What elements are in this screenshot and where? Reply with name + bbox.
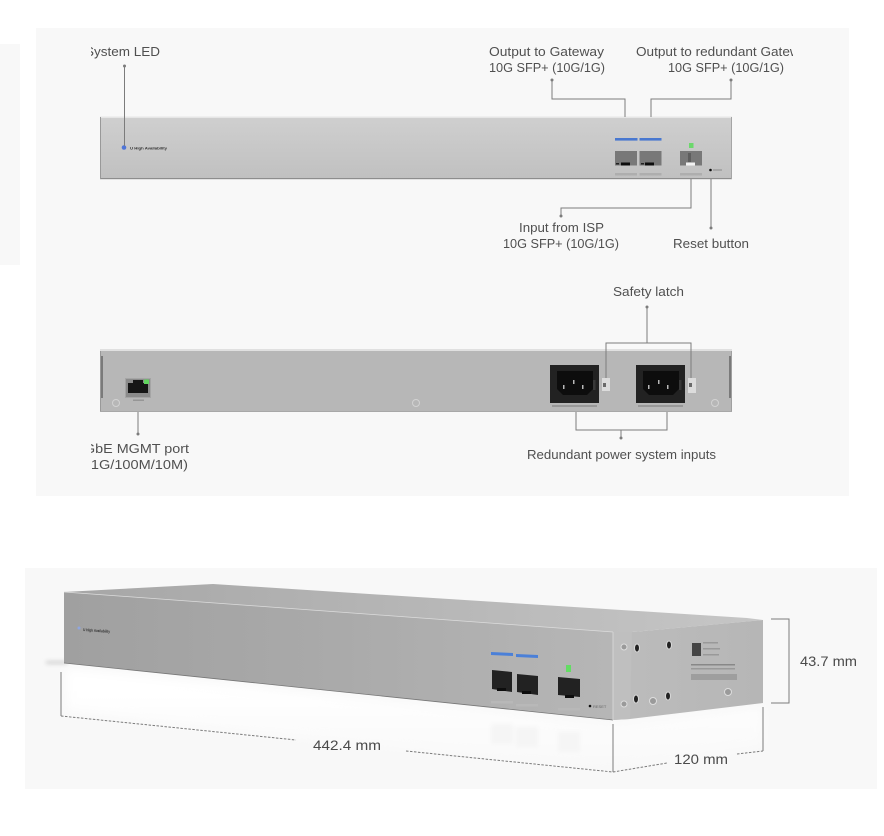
label: output to redundant gateway: Output to redundant Gateway bbox=[636, 44, 815, 59]
icon: ISP LED bbox=[566, 665, 571, 672]
label: reset button: Reset button bbox=[673, 236, 749, 251]
panel: left edge sliver bbox=[0, 44, 20, 265]
dimension lines bbox=[61, 619, 789, 772]
label: GbE MGMT port bbox=[91, 444, 189, 472]
icon: reset pinhole bbox=[709, 169, 712, 171]
label: redundant power: Redundant power system inputs bbox=[527, 447, 717, 462]
dimension: width: 442.4 mm bbox=[313, 737, 381, 753]
front face bbox=[64, 592, 613, 720]
icon: SFP port 1 bbox=[615, 151, 637, 176]
icon: ISP LED bbox=[689, 143, 694, 148]
icon: port 2 bbox=[516, 674, 538, 706]
screws bbox=[112, 400, 718, 406]
icon: ISP port bbox=[558, 677, 580, 710]
floor reflection bbox=[66, 668, 763, 772]
icon: SFP port ISP bbox=[680, 151, 702, 176]
dimension: depth: 120 mm bbox=[674, 751, 728, 767]
device logo text: U High Availability bbox=[130, 146, 168, 150]
logo: U High Availability bbox=[83, 627, 111, 634]
icon: SFP port 2 bbox=[640, 151, 662, 176]
label: output to redundant gateway: 10G SFP+ (10G/1G) bbox=[668, 60, 784, 75]
callout lines bbox=[124, 66, 731, 437]
label: output to gateway: 10G SFP+ (10G/1G) bbox=[489, 60, 605, 75]
side face bbox=[613, 620, 763, 720]
label: output to gateway: Output to Gateway bbox=[489, 44, 605, 59]
front device bbox=[100, 116, 732, 179]
side label bbox=[691, 642, 737, 680]
icon: system LED dot bbox=[122, 145, 126, 150]
callout endpoints bbox=[123, 64, 732, 440]
icon: safety latch 2 bbox=[688, 378, 696, 393]
labels bbox=[84, 44, 815, 472]
3D device bbox=[64, 584, 763, 720]
icon: power inlet 1 bbox=[550, 365, 599, 407]
LED bars bbox=[491, 652, 513, 656]
panel: port diagrams bbox=[91, 46, 793, 472]
icon: safety latch 1 bbox=[602, 378, 610, 391]
label: GbE MGMT port: GbE MGMT port bbox=[84, 441, 189, 456]
top face bbox=[64, 584, 763, 632]
label: input from ISP: Input from ISP bbox=[519, 220, 604, 235]
reset label bbox=[589, 705, 591, 707]
icon: port 1 bbox=[491, 670, 513, 704]
dimension: height: 43.7 mm bbox=[800, 653, 857, 669]
rear device bbox=[100, 349, 732, 412]
side screws bbox=[634, 641, 672, 703]
label: output to redundant gateway bbox=[636, 46, 793, 74]
reflected ports bbox=[491, 724, 580, 752]
label: system LED: System LED bbox=[85, 44, 160, 59]
LED bars for output ports bbox=[615, 138, 662, 141]
label: GbE MGMT port: (1G/100M/10M) bbox=[86, 457, 188, 472]
3D device: RESET bbox=[593, 704, 607, 709]
label: input from ISP bbox=[504, 222, 618, 250]
icon: power inlet 2 bbox=[636, 365, 685, 407]
label: input from ISP: 10G SFP+ (10G/1G) bbox=[503, 236, 619, 251]
side rails bbox=[101, 356, 103, 398]
label: safety latch: Safety latch bbox=[613, 284, 684, 299]
label: output to gateway bbox=[490, 47, 604, 74]
floor shadow bbox=[46, 662, 68, 664]
icon: RJ45 port bbox=[125, 378, 151, 401]
panel: dimensions bbox=[25, 568, 877, 789]
